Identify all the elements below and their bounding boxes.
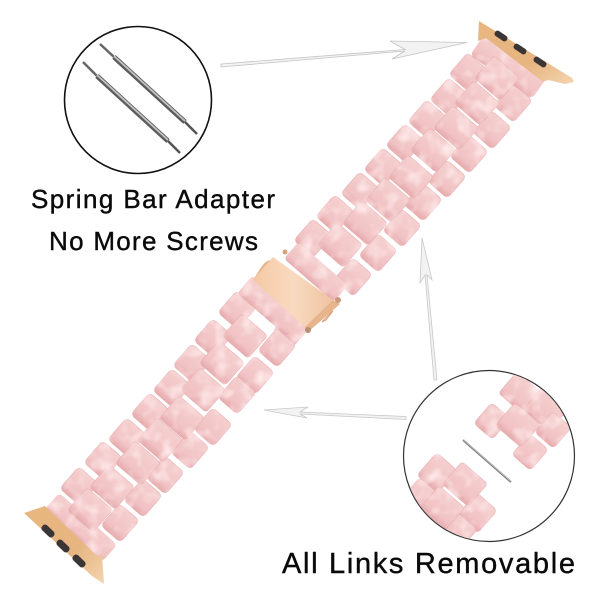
removed links: [410, 374, 570, 539]
caption: Spring Bar Adapter: Spring Bar Adapter: [31, 184, 275, 214]
icon: spring bar 2: [83, 62, 180, 153]
circle inset: removable links: [401, 370, 574, 551]
icon: spring bar 1: [100, 44, 197, 134]
bottom lug: [24, 506, 104, 584]
caption: All Links Removable: All Links Removable: [282, 548, 575, 580]
clasp: [253, 250, 341, 333]
arrow up to band: [420, 238, 437, 380]
arrow to top lug: [221, 41, 467, 67]
circle inset: spring bars: [64, 26, 212, 174]
upper band links: [284, 35, 547, 302]
caption: No More Screws: No More Screws: [49, 226, 258, 256]
top lug: [478, 21, 574, 84]
arrow left to band: [264, 407, 406, 420]
lower band links: [44, 275, 311, 562]
icon: loose pin: [463, 440, 511, 482]
